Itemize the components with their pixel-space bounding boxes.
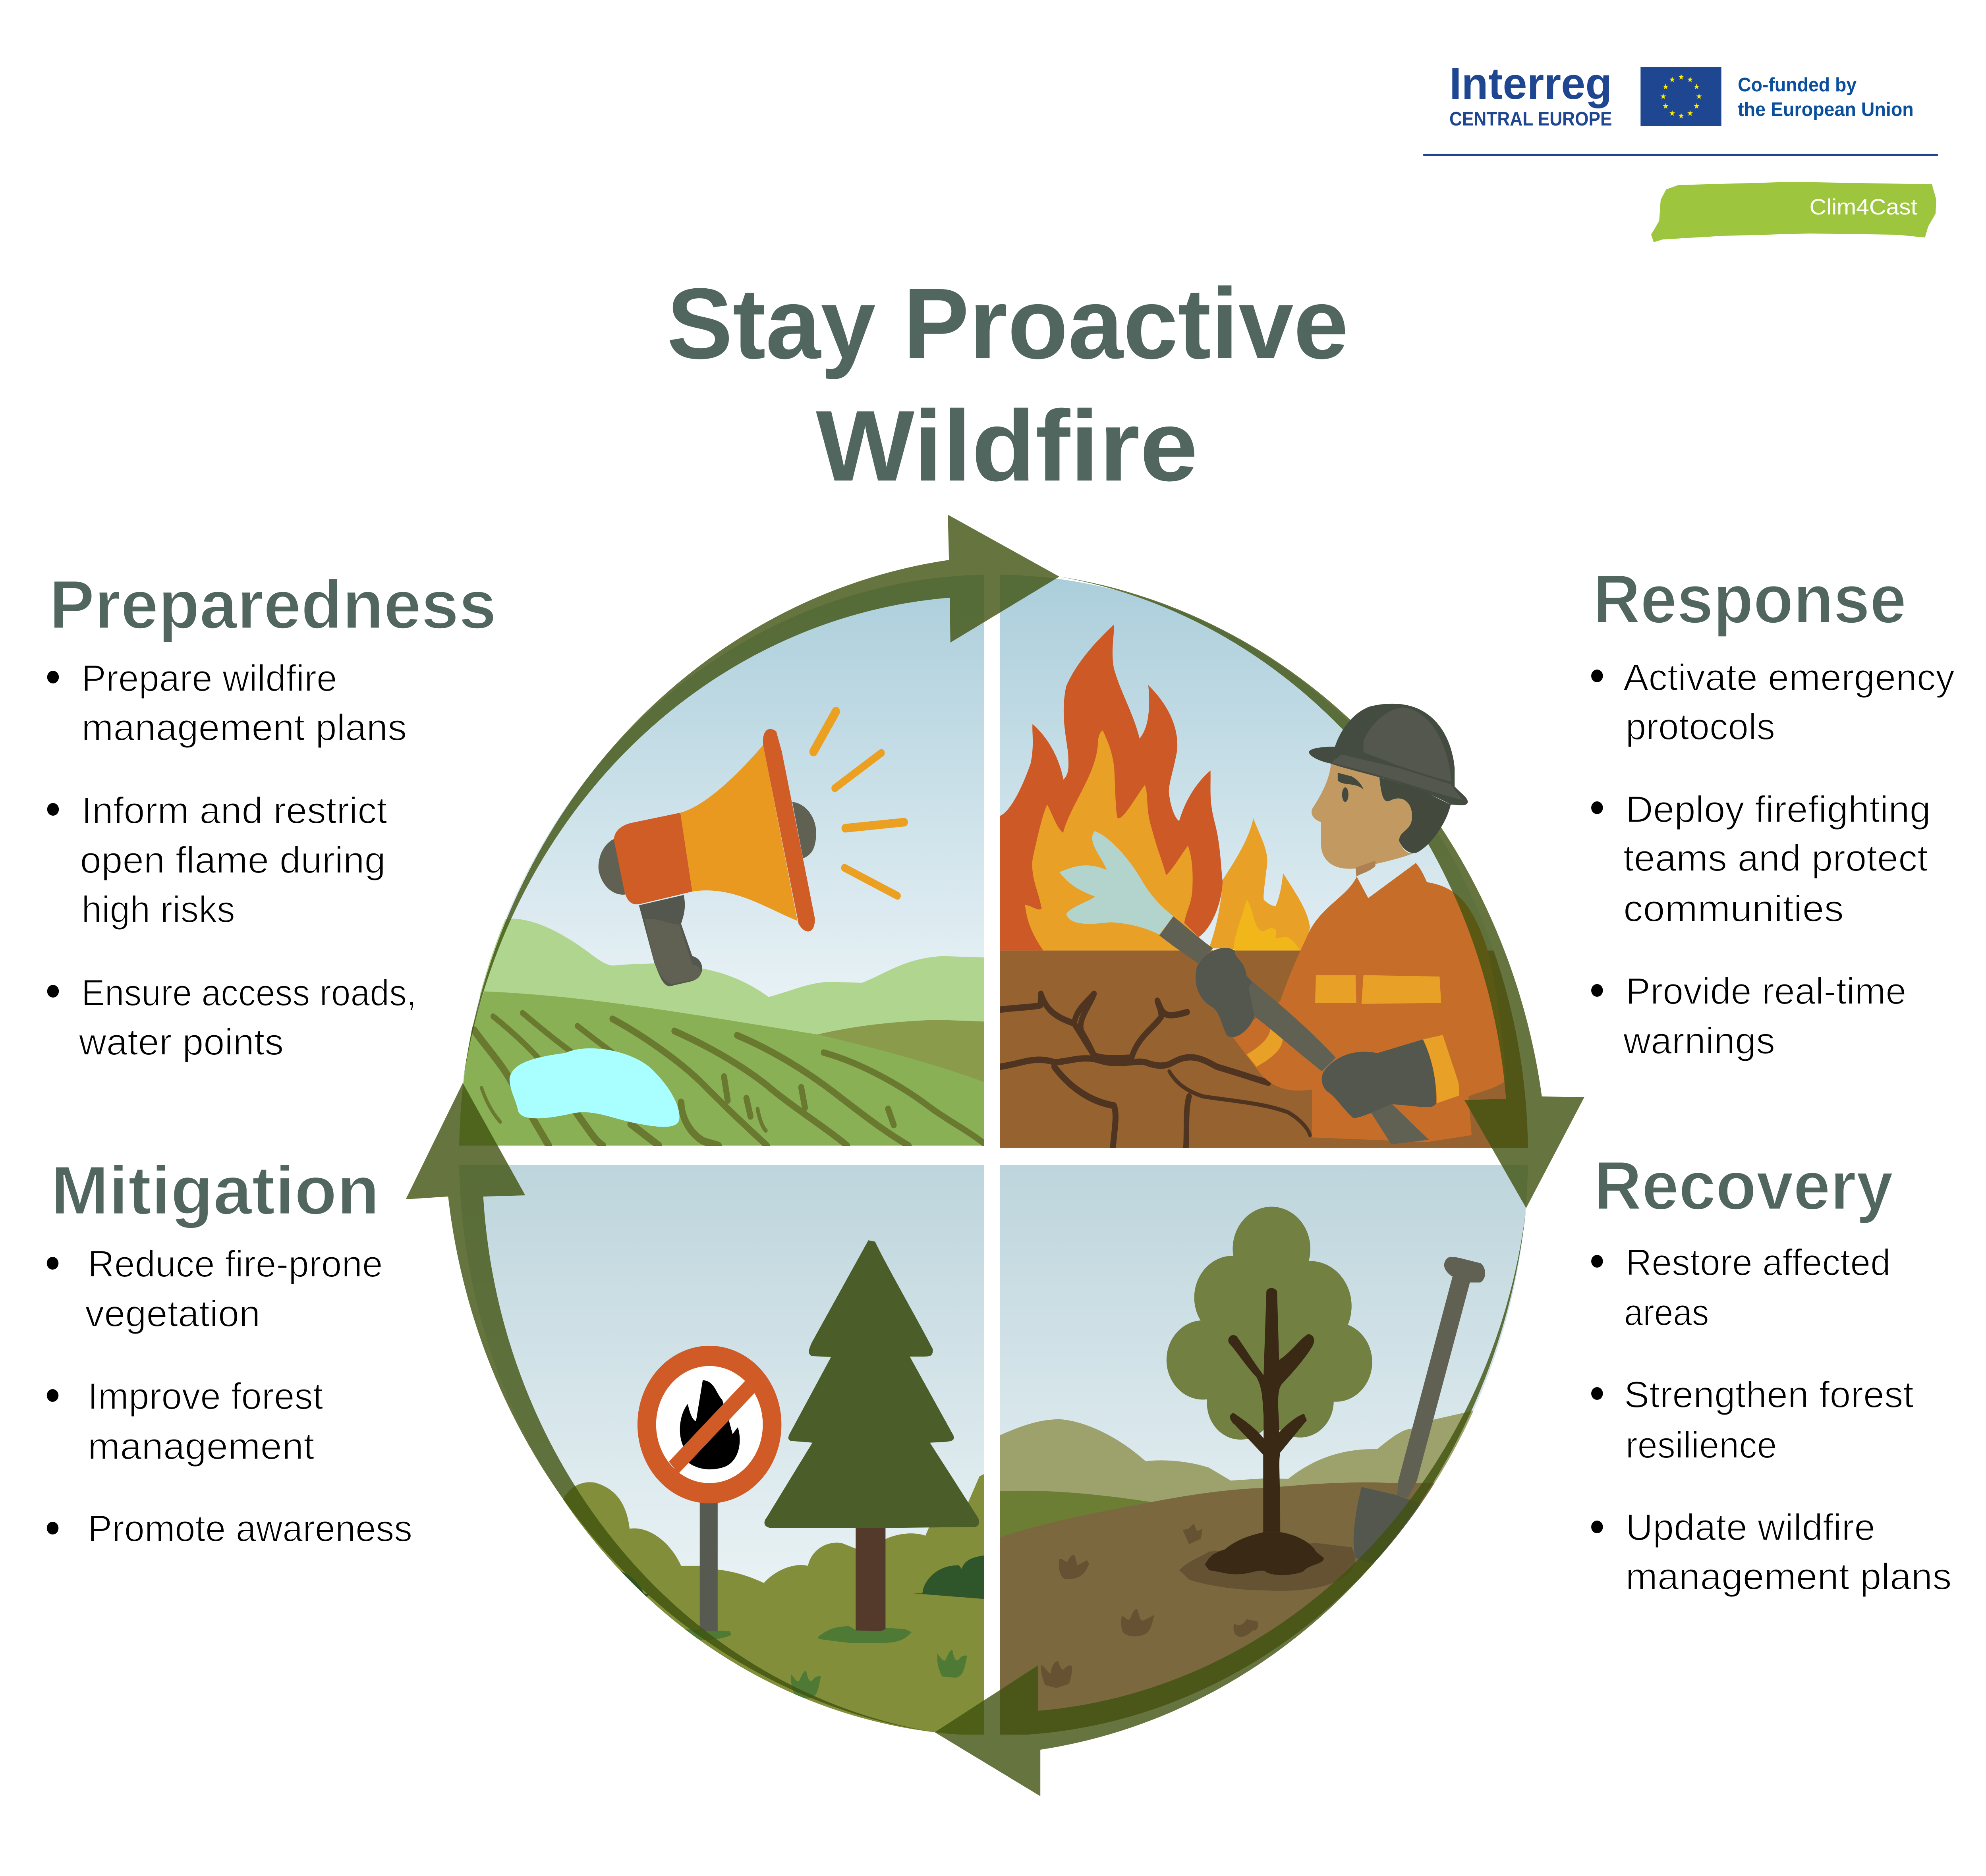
bullet list: recovery actions: areas [1624, 1292, 1709, 1334]
bullet list: recovery actions: Update wildfire [1626, 1507, 1875, 1548]
panel: response scene [1000, 556, 1548, 1148]
logo: Interreg Central Europe [1449, 59, 1612, 129]
bullet list: response actions: protocols [1626, 706, 1775, 748]
arrow ring [406, 515, 1584, 1796]
bullet list: preparedness actions: open flame during [80, 840, 386, 881]
text: co-funded by the European Union: Co-funded by [1738, 73, 1857, 95]
heading: Preparedness: Preparedness [49, 567, 496, 643]
panel: mitigation text [47, 1152, 412, 1550]
panel: preparedness scene [439, 556, 984, 1146]
bullet list: mitigation actions: Reduce fire-prone [88, 1243, 383, 1285]
icon: cracked soil [1000, 951, 1531, 1148]
logo: Clim4Cast brush badge [1651, 182, 1936, 242]
bullet list: recovery actions [1591, 1242, 1951, 1598]
bullet list: mitigation actions: management [88, 1426, 314, 1467]
bullet list: preparedness actions: Prepare wildfire [81, 658, 337, 699]
bullet list: mitigation actions [47, 1243, 412, 1550]
logo: Interreg Central Europe: CENTRAL EUROPE [1449, 108, 1612, 129]
icon: firefighter body and hose [1159, 863, 1506, 1144]
bullet list: response actions: Activate emergency [1623, 657, 1955, 699]
icon: water pond [510, 1048, 680, 1127]
bullet list: response actions: warnings [1623, 1020, 1775, 1062]
arrow: recovery to mitigation [935, 1208, 1526, 1796]
bullet list: preparedness actions: management plans [81, 707, 407, 749]
panel: recovery scene [1000, 1165, 1548, 1737]
text: co-funded by the European Union [1738, 73, 1914, 120]
icon: megaphone [599, 712, 904, 986]
bullet list: mitigation actions: Improve forest [88, 1376, 323, 1417]
bullet list: recovery actions: Strengthen forest [1624, 1374, 1914, 1416]
icon: young tree [1167, 1207, 1372, 1575]
bullet list: response actions: communities [1623, 888, 1844, 930]
bullet list: mitigation actions: vegetation [85, 1293, 260, 1335]
bullet list: response actions: teams and protect [1623, 838, 1928, 879]
heading: Response: Response [1593, 561, 1906, 637]
icon: EU flag [1640, 67, 1721, 126]
panel: response text [1591, 561, 1955, 1062]
bullet list: response actions: Provide real-time [1626, 971, 1906, 1012]
circular illustration [439, 556, 1548, 1737]
title [667, 267, 1348, 502]
panel: recovery text [1591, 1148, 1951, 1598]
icon: shovel [1354, 1257, 1485, 1567]
icon: no fire sign [638, 1346, 781, 1631]
bullet list: preparedness actions: high risks [81, 889, 235, 930]
bullet list: response actions [1591, 657, 1955, 1062]
icon: flames [1000, 625, 1310, 951]
logo: Interreg Central Europe: Interreg [1449, 59, 1612, 108]
logo: Clim4Cast brush badge: Clim4Cast [1809, 195, 1917, 219]
title: Wildfire [816, 390, 1198, 502]
bullet list: preparedness actions [47, 658, 416, 1063]
arrow: mitigation to preparedness [406, 1083, 935, 1732]
bullet list: response actions: Deploy firefighting [1626, 789, 1931, 830]
bullet list: preparedness actions: Ensure access roads, [81, 972, 416, 1014]
bullet list: preparedness actions: Inform and restrict [81, 790, 387, 832]
bullet list: recovery actions: Restore affected [1626, 1242, 1891, 1283]
icon: pine tree [765, 1240, 979, 1631]
heading: Recovery: Recovery [1594, 1148, 1893, 1224]
bullet list: recovery actions: management plans [1626, 1556, 1951, 1598]
text: co-funded by the European Union: the European Union [1738, 98, 1914, 120]
bullet list: preparedness actions: water points [79, 1021, 284, 1063]
heading: Mitigation: Mitigation [51, 1152, 379, 1229]
arrow: response to recovery [1059, 577, 1584, 1208]
title: Stay Proactive [667, 267, 1348, 380]
icon: water jet [1059, 831, 1173, 934]
arrow: preparedness to response [463, 515, 1059, 1083]
panel: mitigation scene [439, 1165, 984, 1737]
bullet list: mitigation actions: Promote awareness [88, 1508, 412, 1550]
panel: preparedness text [47, 567, 496, 1063]
icon: firefighter head and helmet [1309, 704, 1468, 877]
bullet list: recovery actions: resilience [1626, 1424, 1777, 1466]
